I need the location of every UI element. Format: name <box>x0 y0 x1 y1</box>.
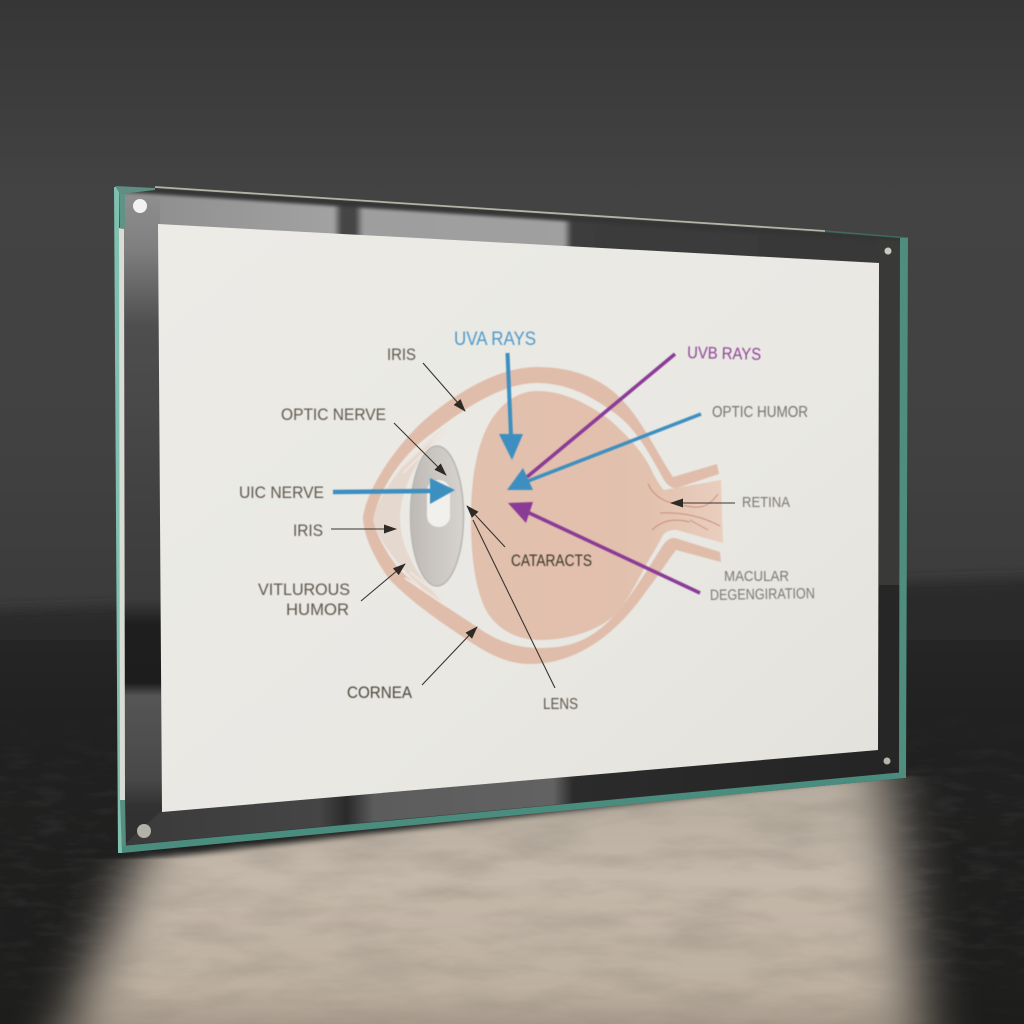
label: vitreous humor <box>258 580 350 619</box>
labels <box>239 329 815 713</box>
label: lens: LENS <box>543 696 578 713</box>
label: UVB rays: UVB RAYS <box>687 343 761 364</box>
eye diagram <box>363 367 723 664</box>
label: vitreous humor: HUMOR <box>286 600 349 619</box>
arrow: UVB <box>527 354 675 477</box>
pupil opening <box>427 480 450 527</box>
label: vitreous humor: VITLUROUS <box>258 580 350 599</box>
paper panel <box>158 224 879 812</box>
mounting screws <box>133 199 892 838</box>
cornea highlights <box>400 426 448 607</box>
label: optic humor: OPTIC HUMOR <box>712 404 808 421</box>
lens <box>410 446 464 586</box>
label: iris: IRIS <box>293 521 323 540</box>
label: macular degeneration <box>710 568 815 604</box>
cornea region <box>372 424 449 609</box>
glass edges <box>114 187 122 853</box>
glass left reflection <box>124 197 163 845</box>
pointer lines <box>331 363 735 688</box>
label: UVA rays: UVA RAYS <box>454 329 536 350</box>
table surface <box>0 578 1024 1024</box>
vitreous body <box>471 391 723 640</box>
arrow: macular <box>508 502 700 593</box>
background wall <box>0 0 1024 640</box>
label: retina: RETINA <box>742 494 790 511</box>
label: macular degeneration: DEGENGIRATION <box>710 585 815 604</box>
glass frame <box>114 186 908 853</box>
label: macular degeneration: MACULAR <box>724 568 789 585</box>
label: uic nerve: UIC NERVE <box>239 483 324 502</box>
arrow: nerve to lens <box>333 478 455 504</box>
glass right band <box>878 240 905 772</box>
arrow: UVA down <box>499 353 523 460</box>
sclera band <box>363 367 721 664</box>
label: iris top: IRIS <box>387 345 416 364</box>
glass top reflection <box>122 192 900 290</box>
label: cornea: CORNEA <box>347 683 413 702</box>
glass bottom band <box>124 750 905 845</box>
retina vessels <box>648 484 720 530</box>
label: optic nerve: OPTIC NERVE <box>281 405 386 424</box>
UV arrows <box>333 353 701 593</box>
arrow: optic humor <box>507 414 701 490</box>
label: cataracts: CATARACTS <box>511 552 592 570</box>
table reflection <box>28 776 961 1024</box>
